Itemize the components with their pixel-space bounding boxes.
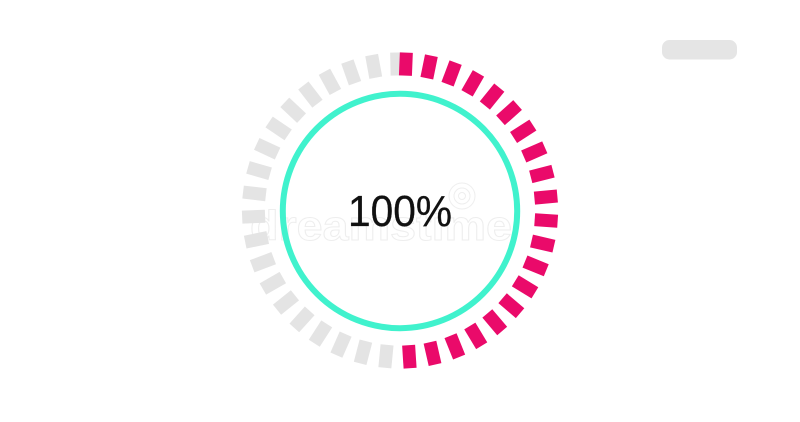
- watermark: [250, 183, 512, 249]
- teal inner ring: [283, 94, 517, 328]
- watermark: dreamstime: [250, 202, 512, 249]
- grey pill placeholder: [662, 40, 737, 60]
- percentage label: 100%: [348, 187, 452, 236]
- progress fill: pink segments: [399, 52, 558, 369]
- progress track: grey segments: [242, 52, 404, 368]
